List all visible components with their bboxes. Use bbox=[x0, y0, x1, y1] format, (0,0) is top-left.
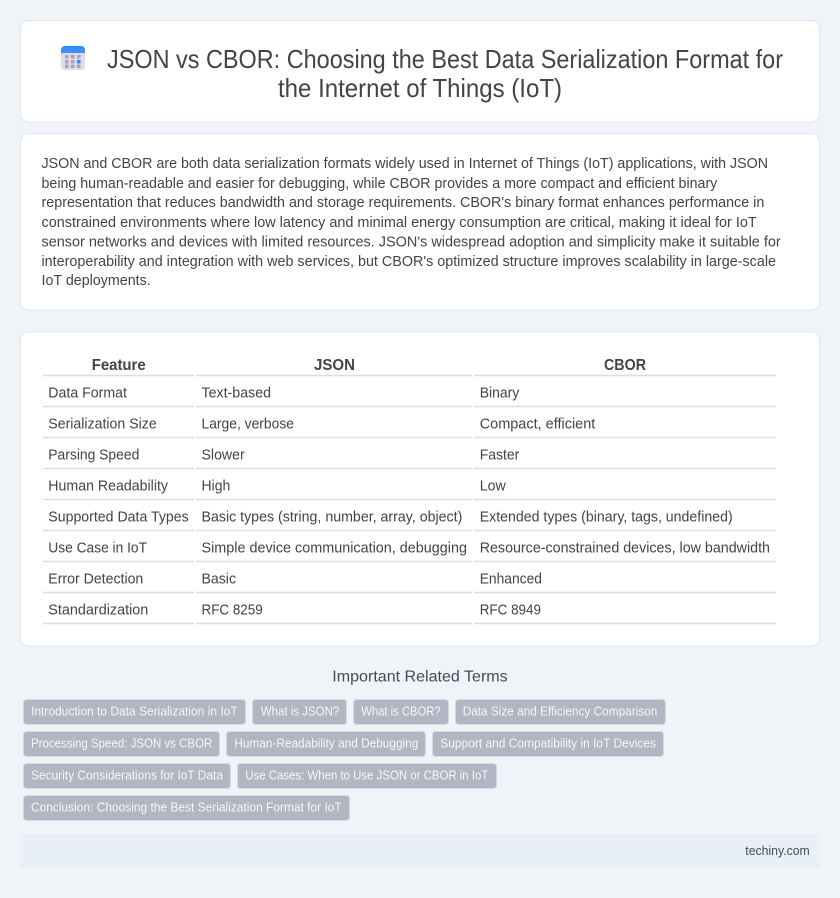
tag: conclusion bbox=[24, 796, 350, 820]
table header row: CBOR bbox=[604, 357, 646, 374]
tag: human readability bbox=[226, 732, 426, 756]
row: supported data types: Supported Data Types bbox=[48, 509, 189, 525]
row: human readability: High bbox=[202, 478, 230, 494]
tag: what is json: What is JSON? bbox=[261, 705, 339, 719]
row: supported data types: Basic types (string, number, array, object) bbox=[202, 509, 462, 525]
tag: introduction bbox=[24, 700, 246, 724]
row: parsing speed: Parsing Speed bbox=[48, 447, 139, 463]
tag: support and compatibility bbox=[432, 732, 664, 756]
tag: what is cbor bbox=[354, 700, 448, 724]
tag: use cases: Use Cases: When to Use JSON or CBOR in IoT bbox=[245, 769, 489, 783]
tag: data size bbox=[456, 700, 666, 724]
row: error detection: Enhanced bbox=[480, 571, 542, 587]
panel: summary text: JSON and CBOR are both data serialization formats widely used in Internet of Things (IoT) applications, with JSON bbox=[42, 156, 768, 172]
row: data format: Text-based bbox=[202, 385, 271, 401]
table header row: Feature bbox=[92, 357, 146, 374]
tag: introduction: Introduction to Data Serialization in IoT bbox=[31, 705, 238, 719]
footer bbox=[20, 834, 820, 868]
tag: support and compatibility: Support and Compatibility in IoT Devices bbox=[440, 737, 656, 751]
row: use case in iot: Use Case in IoT bbox=[48, 540, 147, 556]
tag: security bbox=[24, 764, 230, 788]
title: the Internet of Things (IoT) bbox=[278, 75, 562, 103]
row: use case in iot: Simple device communication, debugging bbox=[202, 540, 467, 556]
row: data format: Binary bbox=[480, 385, 520, 401]
row: error detection: Error Detection bbox=[48, 571, 143, 587]
row: parsing speed bbox=[43, 447, 776, 468]
tag: conclusion: Conclusion: Choosing the Best Serialization Format for IoT bbox=[31, 801, 342, 815]
table header row bbox=[43, 357, 776, 376]
panel: summary text: being human-readable and easier for debugging, while CBOR provides a more compact and efficient binary bbox=[42, 176, 718, 192]
row: supported data types bbox=[43, 509, 776, 530]
row: standardization: RFC 8259 bbox=[202, 602, 263, 618]
row: error detection bbox=[43, 571, 776, 592]
row: use case in iot: Resource-constrained devices, low bandwidth bbox=[480, 540, 770, 556]
title bbox=[107, 46, 783, 103]
icon: calendar grid bbox=[61, 46, 85, 70]
tag: use cases bbox=[238, 764, 496, 788]
panel: summary text: constrained environments where low latency and minimal energy consumption are critical, making it ideal for IoT bbox=[42, 215, 757, 231]
row: data format bbox=[43, 385, 776, 406]
row: standardization bbox=[43, 602, 776, 624]
row: use case in iot bbox=[43, 540, 776, 562]
row: human readability bbox=[43, 478, 776, 500]
tag: what is cbor: What is CBOR? bbox=[361, 705, 441, 719]
tag: processing speed: Processing Speed: JSON vs CBOR bbox=[31, 737, 212, 751]
row: serialization size: Serialization Size bbox=[48, 416, 157, 432]
tag: what is json bbox=[252, 700, 346, 724]
panel: summary text: IoT deployments. bbox=[42, 273, 151, 289]
panel: summary text: interoperability and integration with web services, but CBOR's optimized structure improves scalability in large-scale bbox=[42, 254, 776, 270]
row: standardization: RFC 8949 bbox=[480, 602, 541, 618]
row: supported data types: Extended types (binary, tags, undefined) bbox=[480, 509, 733, 525]
row: parsing speed: Faster bbox=[480, 447, 519, 463]
title: JSON vs CBOR: Choosing the Best Data Serialization Format for bbox=[107, 46, 783, 74]
row: serialization size bbox=[43, 416, 776, 438]
footer: techiny.com bbox=[745, 843, 810, 858]
panel: comparison table bbox=[20, 332, 820, 646]
related term tags bbox=[24, 700, 666, 820]
row: serialization size: Compact, efficient bbox=[480, 416, 595, 432]
row: human readability: Low bbox=[480, 478, 506, 494]
row: serialization size: Large, verbose bbox=[202, 416, 294, 432]
row: human readability: Human Readability bbox=[48, 478, 169, 494]
row: data format: Data Format bbox=[48, 385, 127, 401]
row: error detection: Basic bbox=[202, 571, 236, 587]
tag: human readability: Human-Readability and Debugging bbox=[234, 737, 418, 751]
panel: title header bbox=[20, 20, 820, 122]
panel: summary text bbox=[20, 134, 820, 310]
row: standardization: Standardization bbox=[48, 602, 148, 618]
panel: summary text: representation that reduces bandwidth and storage requirements. CBOR's binary format enhances performance in bbox=[42, 195, 764, 211]
tag: data size: Data Size and Efficiency Comparison bbox=[463, 705, 657, 719]
panel: summary text: sensor networks and devices with limited resources. JSON's widespread adoption and simplicity make it suitable for bbox=[42, 234, 781, 250]
row: parsing speed: Slower bbox=[202, 447, 245, 463]
tag: security: Security Considerations for IoT Data bbox=[31, 769, 223, 783]
table header row: JSON bbox=[314, 357, 355, 374]
tag: processing speed bbox=[24, 732, 220, 756]
heading: important related terms: Important Related Terms bbox=[332, 669, 508, 686]
